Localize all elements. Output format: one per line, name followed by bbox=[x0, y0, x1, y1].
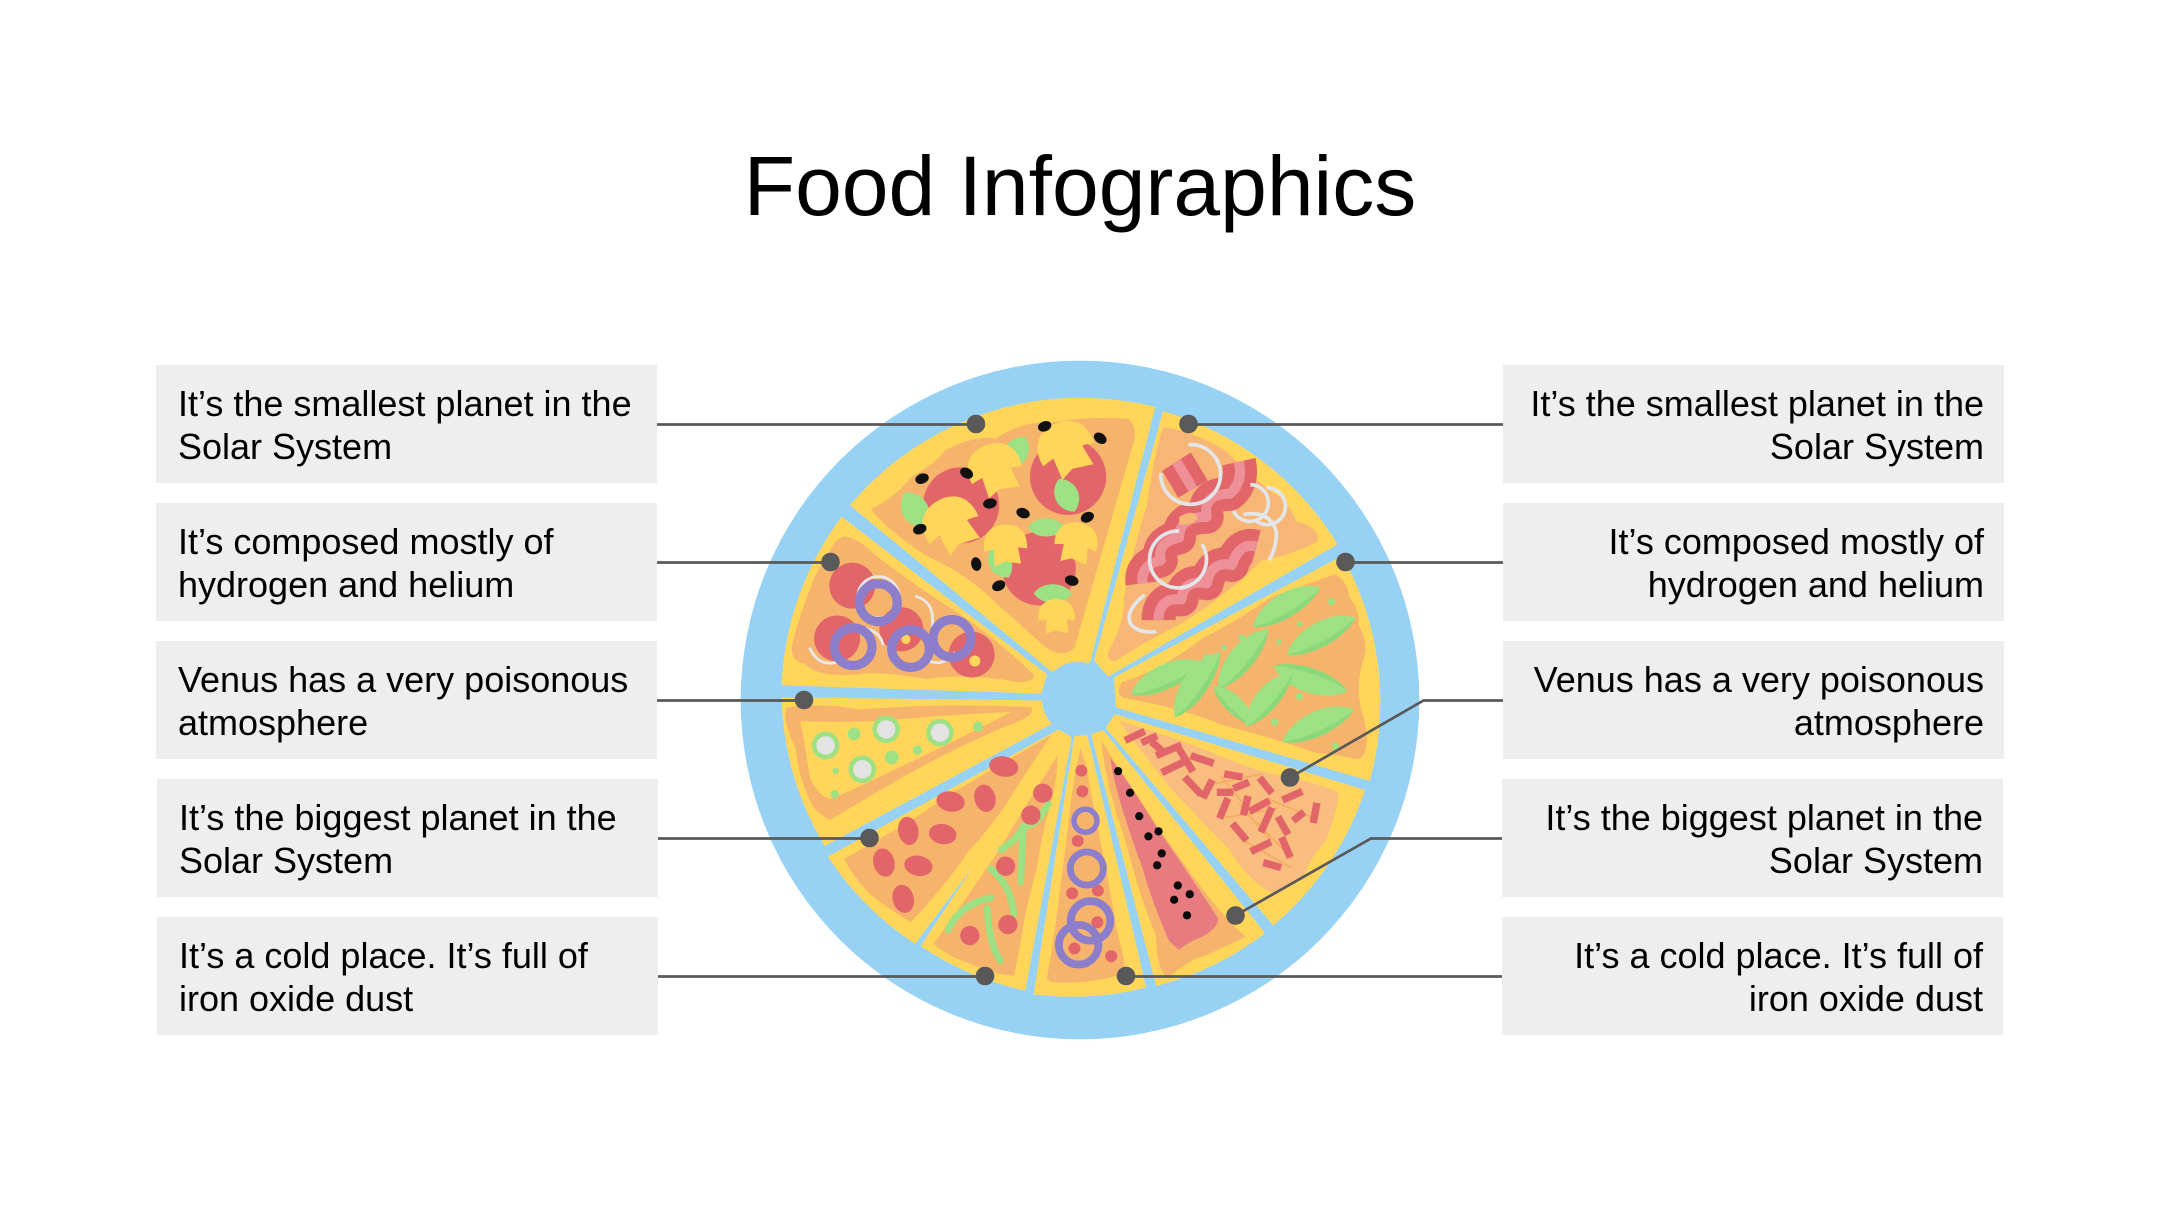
text card: left 2: hydrogen and helium bbox=[178, 564, 514, 605]
text card: right 3: Venus has a very poisonous bbox=[1534, 659, 1984, 700]
connector right 1 bbox=[1179, 415, 1503, 433]
connector right 5 bbox=[1117, 967, 1502, 985]
text card: right 2: hydrogen and helium bbox=[1648, 564, 1984, 605]
text card: right 3: atmosphere bbox=[1794, 702, 1984, 743]
slice: pepperoni and purple onion bbox=[782, 517, 1047, 694]
slice: salami with black pepper bbox=[1091, 730, 1265, 986]
text card: left 1: Solar System bbox=[178, 426, 392, 467]
connector left 5 bbox=[658, 967, 994, 985]
slice: green strips and red dots bbox=[921, 734, 1072, 991]
text card: right 4 bbox=[1502, 779, 2003, 897]
text card: right 5: It’s a cold place. It’s full of bbox=[1574, 935, 1983, 976]
text card: right 1: It’s the smallest planet in the bbox=[1530, 383, 1984, 424]
text card: left 5: iron oxide dust bbox=[179, 978, 413, 1019]
slice: cheese with green rings bbox=[782, 697, 1053, 846]
slice: purple rings bbox=[1034, 735, 1146, 997]
connector left 2 bbox=[657, 553, 840, 571]
text card: left 2: It’s composed mostly of bbox=[178, 521, 554, 562]
slice: chopped bacon bits bbox=[1106, 714, 1365, 925]
centre hub bbox=[1042, 662, 1115, 735]
text card: left 5 bbox=[157, 917, 658, 1035]
plate bbox=[741, 361, 1419, 1039]
text card: left 3: atmosphere bbox=[178, 702, 368, 743]
text card: left 3 bbox=[156, 641, 657, 759]
pizza plate illustration bbox=[741, 361, 1419, 1039]
text card: left 3: Venus has a very poisonous bbox=[178, 659, 628, 700]
connector left 3 bbox=[657, 691, 813, 709]
text card: left 4: Solar System bbox=[179, 840, 393, 881]
text card: right 5 bbox=[1502, 917, 2003, 1035]
text card: right 3 bbox=[1503, 641, 2004, 759]
text card: right 4: It’s the biggest planet in the bbox=[1545, 797, 1983, 838]
text card: left 4: It’s the biggest planet in the bbox=[179, 797, 617, 838]
slice: pepperoni, mushroom and olive bbox=[850, 398, 1155, 672]
text card: left 4 bbox=[157, 779, 658, 897]
text card: right 2: It’s composed mostly of bbox=[1608, 521, 1984, 562]
connector right 4 bbox=[1226, 838, 1502, 925]
connector left 1 bbox=[657, 415, 985, 433]
text card: left 1 bbox=[156, 365, 657, 483]
slice: basil leaves bbox=[1114, 556, 1380, 781]
slice: bacon strips and onion bbox=[1094, 411, 1338, 677]
connector left 4 bbox=[658, 829, 879, 847]
text card: left 1: It’s the smallest planet in the bbox=[178, 383, 632, 424]
text card: left 5: It’s a cold place. It’s full of bbox=[179, 935, 588, 976]
slice: red ovals bbox=[828, 729, 1071, 944]
connector right 3 bbox=[1281, 700, 1503, 787]
text card: right 1: Solar System bbox=[1770, 426, 1984, 467]
text card: left 2 bbox=[156, 503, 657, 621]
title: Food Infographics bbox=[744, 139, 1416, 233]
connector right 2 bbox=[1336, 553, 1503, 571]
text card: right 5: iron oxide dust bbox=[1749, 978, 1983, 1019]
text card: right 4: Solar System bbox=[1769, 840, 1983, 881]
text card: right 1 bbox=[1503, 365, 2004, 483]
text card: right 2 bbox=[1503, 503, 2004, 621]
